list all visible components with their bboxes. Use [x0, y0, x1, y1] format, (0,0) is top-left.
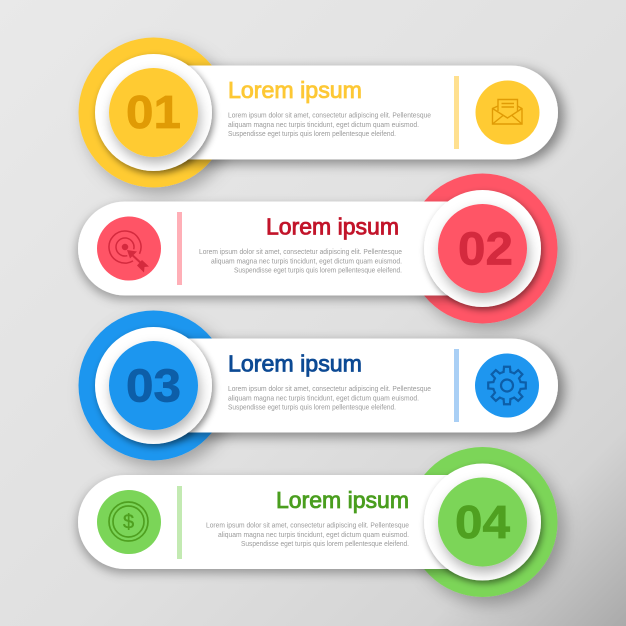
white disc 03 — [95, 327, 212, 444]
banner 04 — [78, 475, 483, 569]
body text 02: aliquam magna nec turpis tincidunt, eget dictum quam euismod. — [211, 256, 402, 266]
body text 02: Suspendisse eget turpis quis lorem pellentesque eleifend. — [234, 266, 402, 274]
icon: dollar coin — [97, 490, 161, 554]
panel: step 01 — [78, 38, 558, 188]
divider 04 — [177, 486, 182, 559]
body text 01 — [228, 110, 431, 138]
icon: envelope — [476, 80, 540, 144]
outer ring 02 — [408, 174, 558, 324]
body text 02: Lorem ipsum dolor sit amet, consectetur adipiscing elit. Pellentesque — [199, 247, 402, 256]
number disc 02 — [438, 204, 527, 293]
white disc 02 — [424, 190, 541, 307]
divider 02 — [177, 212, 182, 285]
outer ring 01 — [78, 38, 228, 188]
body text 01: aliquam magna nec turpis tincidunt, eget dictum quam euismod. — [228, 120, 419, 129]
number 04: 04 — [455, 496, 510, 548]
number disc 03 — [109, 341, 198, 430]
body text 01: Suspendisse eget turpis quis lorem pellentesque eleifend. — [228, 129, 396, 138]
body text 02 — [199, 247, 402, 274]
body text 04: Suspendisse eget turpis quis lorem pellentesque eleifend. — [241, 539, 409, 548]
number disc 04 — [438, 478, 527, 566]
outer ring 03 — [78, 310, 228, 460]
body text 04 — [206, 520, 409, 548]
icon: target with arrow — [97, 216, 161, 280]
body text 03: Lorem ipsum dolor sit amet, consectetur adipiscing elit. Pellentesque — [228, 384, 431, 393]
banner 03 — [153, 338, 558, 432]
heading 03: Lorem ipsum — [228, 350, 362, 376]
banner 02 — [78, 202, 483, 296]
panel: step 03 — [78, 310, 558, 460]
body text 04: Lorem ipsum dolor sit amet, consectetur adipiscing elit. Pellentesque — [206, 520, 409, 530]
heading 02: Lorem ipsum — [266, 214, 399, 240]
number disc 01 — [109, 68, 198, 157]
banner 01 — [153, 66, 558, 160]
body text 03 — [228, 384, 431, 412]
white disc 01 — [95, 54, 212, 171]
number 01: 01 — [126, 86, 181, 138]
number 03: 03 — [126, 360, 181, 412]
divider 01 — [454, 76, 459, 149]
divider 03 — [454, 349, 459, 422]
white disc 04 — [424, 464, 541, 580]
body text 01: Lorem ipsum dolor sit amet, consectetur adipiscing elit. Pellentesque — [228, 110, 431, 120]
icon: dollar coin: $ — [123, 512, 134, 534]
icon: gear — [475, 354, 539, 418]
body text 03: Suspendisse eget turpis quis lorem pellentesque eleifend. — [228, 402, 396, 412]
heading 01: Lorem ipsum — [228, 77, 362, 103]
outer ring 04 — [408, 447, 558, 597]
body text 03: aliquam magna nec turpis tincidunt, eget dictum quam euismod. — [228, 394, 419, 402]
number 02: 02 — [458, 222, 513, 274]
panel: step 02 — [78, 174, 557, 324]
heading 04: Lorem ipsum — [276, 487, 409, 513]
panel: step 04 — [78, 447, 558, 597]
body text 04: aliquam magna nec turpis tincidunt, eget dictum quam euismod. — [218, 530, 409, 539]
